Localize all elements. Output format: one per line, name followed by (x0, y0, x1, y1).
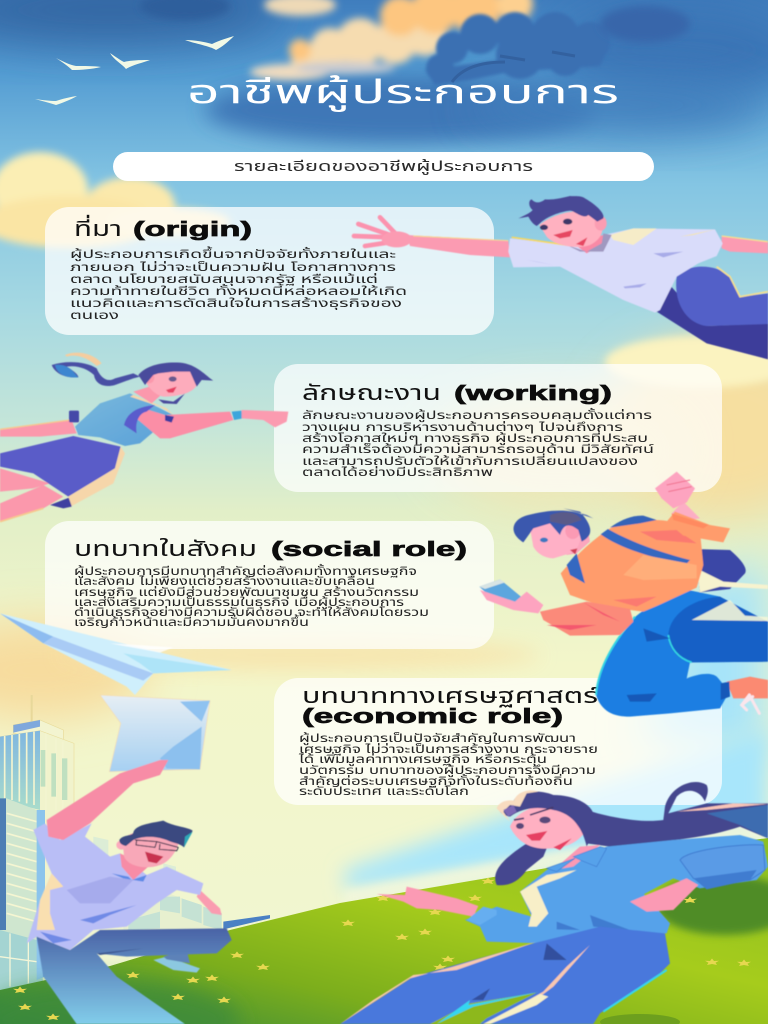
peach cloud (250, 0, 533, 80)
text: economic role body: นวัตกรรม บทบาทของผู้ประกอบการจึงมีความ (299, 763, 596, 777)
buildings (0, 695, 270, 990)
heading: economic role: บทบาททางเศรษฐศาสตร์ (302, 685, 599, 708)
text: social role body: เจริญก้าวหน้าและมีความมั่นคงมากขึ้น (74, 614, 309, 629)
subtitle pill: รายละเอียดของอาชีพผู้ประกอบการ (234, 158, 533, 175)
text: origin body (70, 246, 407, 322)
text: social role body: และสังคม ไม่เพียงแต่ช่วยสร้างงานและขับเคลื่อน (74, 573, 375, 588)
text: social role body: ดำเนินธุรกิจอย่างมีความรับผิดชอบ จะทำให้สังคมโดยรวม (74, 605, 429, 619)
text: working body: วางแผน การบริหารงานด้านต่างๆ ไปจนถึงการ (302, 420, 624, 434)
text: origin body: ความท้าทายในชีวิต ทั้งหมดนี้หล่อหลอมให้เกิด (70, 283, 407, 298)
sheet of paper (100, 695, 210, 772)
heading: origin: ที่มา (74, 214, 122, 241)
heading: working: (working) (454, 383, 612, 405)
clouds (0, 0, 768, 388)
text: origin body: แนวคิดและการตัดสินใจในการสร้างธุรกิจของ (70, 296, 402, 310)
panel: working (274, 364, 722, 492)
birds (35, 36, 234, 105)
subtitle pill (113, 152, 654, 181)
text: economic role body: ได้ เพิ่มมูลค่าทางเศรษฐกิจ หรือกระตุ้น (298, 752, 547, 766)
panel: social role (45, 521, 494, 649)
text: working body: ความสำเร็จต้องมีความสามารถรอบด้าน มีวิสัยทัศน์ (302, 442, 654, 456)
heading: origin (74, 214, 252, 241)
text: working body: สร้างโอกาสใหม่ๆ ทางธุรกิจ ผู้ประกอบการที่ประสบ (302, 430, 648, 445)
text: economic role body: เศรษฐกิจ ไม่ว่าจะเป็นการสร้างงาน กระจายราย (299, 742, 598, 756)
text: social role body: ผู้ประกอบการมีบทบาทสำคัญต่อสังคมทั้งทางเศรษฐกิจ (74, 564, 417, 578)
illustration: woman in blue on the grass (340, 782, 768, 1024)
title: อาชีพผู้ประกอบการ (187, 73, 619, 112)
illustration: flying boy in white t-shirt (354, 196, 768, 359)
heading: working (302, 382, 612, 405)
heading: economic role (302, 685, 599, 728)
text: working body: ลักษณะงานของผู้ประกอบการครอบคลุมตั้งแต่การ (302, 408, 653, 422)
grass hill (0, 838, 768, 1024)
panel: economic role (274, 678, 722, 805)
left yellow cloud (0, 152, 230, 248)
dark cloud (425, 12, 610, 85)
illustration: man with glasses holding paper (27, 695, 232, 1024)
panel: origin (45, 207, 494, 335)
heading: origin: (origin) (133, 219, 252, 241)
text: social role body: และส่งเสริมความเป็นธรรมในธุรกิจ เมื่อผู้ประกอบการ (74, 594, 405, 609)
text: economic role body: สำคัญต่อระบบเศรษฐกิจทั้งในระดับท้องถิ่น (299, 774, 573, 788)
text: economic role body: ผู้ประกอบการเป็นปัจจัยสำคัญในการพัฒนา (299, 731, 576, 745)
heading: social role: บทบาทในสังคม (74, 538, 257, 561)
text: origin body: ตลาด นโยบายสนับสนุนจากรัฐ หรือแม้แต่ (70, 272, 378, 286)
text: origin body: ผู้ประกอบการเกิดขึ้นจากปัจจัยทั้งภายในและ (70, 246, 396, 261)
illustration: boy with phone and backpack (479, 472, 768, 717)
text: origin body: ภายนอก ไม่ว่าจะเป็นความฝัน โอกาสทางการ (70, 260, 397, 274)
text: social role body (74, 564, 429, 629)
text: working body: และสามารถปรับตัวให้เข้ากับการเปลี่ยนแปลงของ (302, 453, 638, 468)
text: social role body: เศรษฐกิจ แต่ยังมีส่วนช่วยพัฒนาชุมชน สร้างนวัตกรรม (74, 585, 419, 599)
icon: paper plane (0, 613, 232, 695)
text: working body: ตลาดได้อย่างมีประสิทธิภาพ (302, 465, 493, 479)
illustration: flying girl with ponytail (0, 353, 288, 522)
heading: working: ลักษณะงาน (302, 382, 441, 405)
heading: social role (74, 538, 467, 561)
heading: social role: (social role) (271, 539, 467, 561)
text: origin body: ตนเอง (70, 310, 119, 322)
text: economic role body (298, 731, 598, 798)
text: working body (302, 408, 654, 479)
text: economic role body: ระดับประเทศ และระดับโลก (299, 785, 469, 798)
heading: economic role: (economic role) (302, 706, 563, 728)
